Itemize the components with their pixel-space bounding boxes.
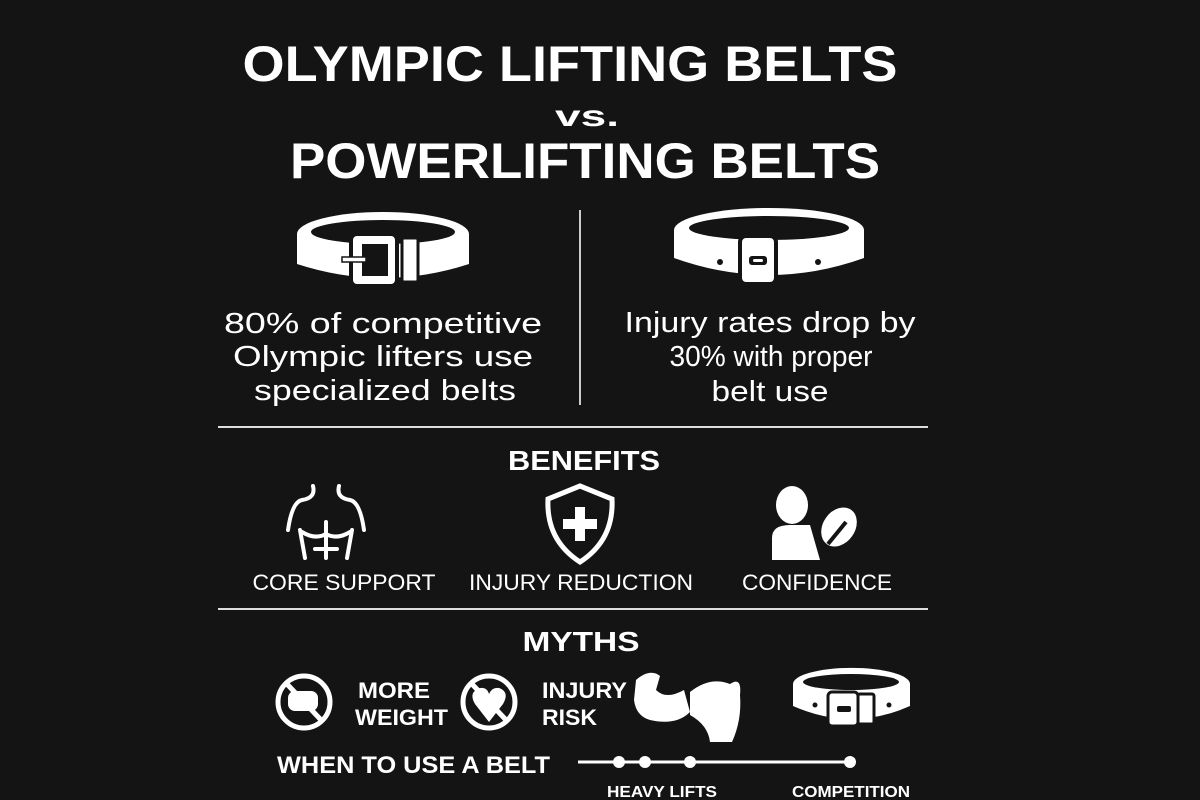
myth label: injury risk — [542, 678, 627, 730]
icon: no more weight — [278, 676, 330, 728]
myth label: more weight: WEIGHT — [355, 705, 449, 730]
myth label: more weight: MORE — [358, 678, 430, 703]
title: POWERLIFTING BELTS — [290, 133, 880, 189]
timeline — [578, 756, 910, 800]
myth label: injury risk: INJURY — [542, 678, 627, 703]
stat: right: Injury rates drop by — [624, 307, 916, 339]
myth label: more weight — [355, 678, 449, 730]
title: OLYMPIC LIFTING BELTS — [242, 36, 898, 92]
icon: no injury — [463, 676, 515, 728]
stat: left: specialized belts — [254, 375, 516, 407]
title — [242, 36, 898, 189]
title: vs. — [555, 100, 619, 133]
icon: olympic belt — [297, 212, 469, 286]
benefit labels: INJURY REDUCTION — [469, 570, 693, 595]
stat: left: Olympic lifters use — [233, 341, 533, 373]
heading: benefits: BENEFITS — [508, 445, 660, 476]
stat: right: 30% with proper — [670, 341, 873, 373]
stat: right — [624, 307, 916, 408]
benefit labels: CORE SUPPORT — [252, 570, 436, 595]
icon: confidence — [772, 486, 867, 560]
icon: muscle — [634, 673, 740, 742]
icon: shield — [548, 486, 612, 562]
stat: right: belt use — [712, 376, 828, 408]
myth label: injury risk: RISK — [542, 705, 597, 730]
stat: left: 80% of competitive — [224, 308, 542, 340]
benefit labels — [252, 570, 892, 595]
stat: left — [224, 308, 542, 407]
benefit labels: CONFIDENCE — [742, 570, 892, 595]
icon: belt — [793, 668, 910, 726]
icon: powerlifting belt — [674, 208, 864, 284]
icon: core support — [288, 486, 364, 558]
heading: myths: MYTHS — [522, 626, 640, 657]
heading: when to use a belt: WHEN TO USE A BELT — [277, 752, 550, 779]
